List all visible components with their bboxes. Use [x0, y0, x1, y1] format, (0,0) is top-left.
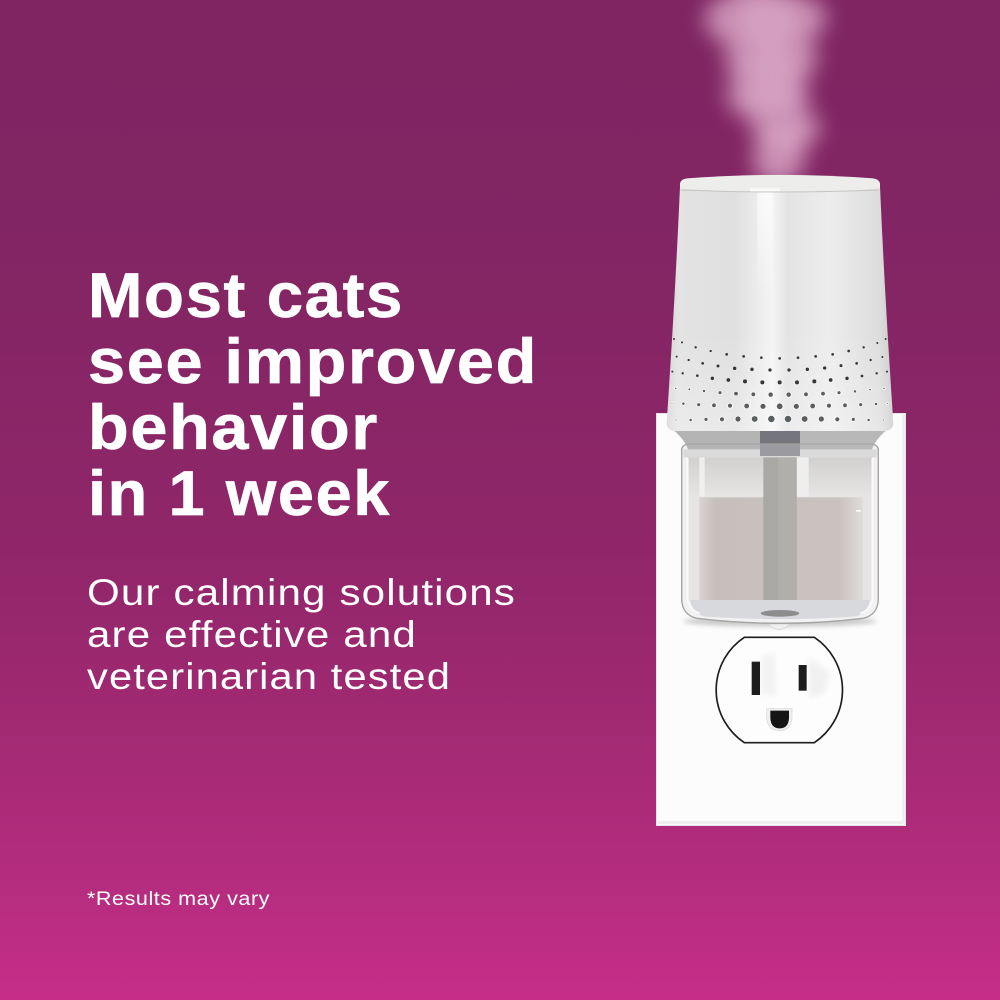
diffuser refill jar [673, 430, 887, 629]
right slot [799, 665, 807, 691]
jar base [690, 600, 870, 619]
housing body [667, 187, 893, 431]
wick [763, 457, 797, 603]
wall plate [656, 413, 906, 826]
jar shadow [683, 616, 877, 627]
outlet face [716, 637, 842, 743]
heading: see improved [88, 327, 538, 397]
subheading text: are effective and [87, 614, 417, 655]
diffuser white housing [667, 175, 893, 431]
heading [88, 261, 538, 529]
electrical outlet [716, 637, 842, 743]
liquid [699, 497, 863, 600]
subheading text: veterinarian tested [87, 656, 451, 697]
subheading text [87, 572, 516, 697]
heading: in 1 week [88, 459, 391, 529]
jar neck [673, 430, 760, 450]
footnote: *Results may vary [87, 888, 270, 910]
ground hole [767, 709, 792, 731]
housing lid [680, 175, 880, 192]
left slot [752, 662, 760, 695]
vent holes [671, 338, 888, 384]
heading: Most cats [88, 261, 404, 331]
subheading text: Our calming solutions [87, 572, 516, 613]
steam plume [707, 0, 823, 183]
heading: behavior [88, 393, 379, 463]
